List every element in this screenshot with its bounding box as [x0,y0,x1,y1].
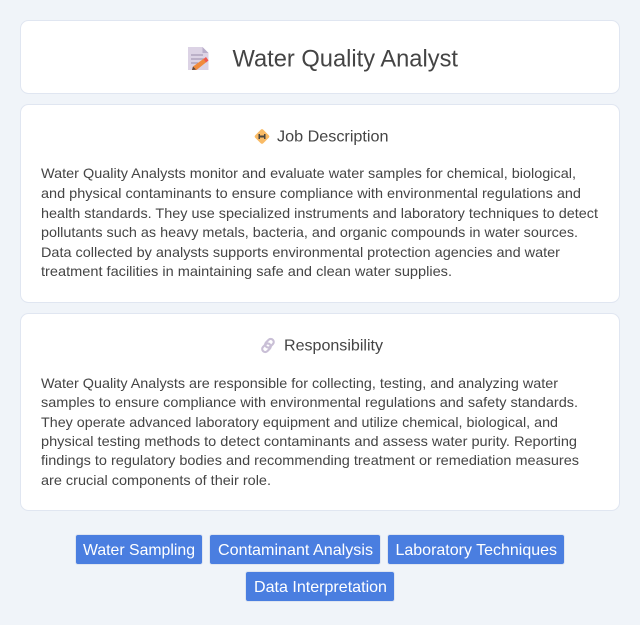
heading: responsibility: Responsibility [284,338,383,354]
icon: link [261,338,275,353]
title: Water Quality Analyst [232,46,458,72]
text block: responsibility: They operate advanced laboratory equipment and utilize chemical, biological, and [41,414,558,430]
tag: contaminant analysis: Contaminant Analysis [218,542,373,559]
text block: responsibility: findings to regulatory bodies and recommending treatment or remediation measures [41,452,579,468]
icon: construction diamond [254,128,270,145]
panel: responsibility [20,314,620,510]
text block: responsibility: Water Quality Analysts are responsible for collecting, testing, and analyzing water [41,375,558,391]
tag: data interpretation [246,572,394,602]
tag: laboratory techniques: Laboratory Techniques [396,542,557,559]
heading: job description: Job Description [277,128,388,146]
tag: data interpretation: Data Interpretation [254,579,387,596]
text block: responsibility [41,375,579,488]
panel: title card [20,20,620,94]
text block: responsibility: are crucial components of their role. [41,472,271,488]
icon: memo with pencil [188,47,208,70]
text block: job description: treatment facilities in maintaining safe and clean water supplies. [41,263,452,279]
text block: job description: and physical contaminants to ensure compliance with environmental regulations and [41,185,581,201]
tag: water sampling [76,534,202,564]
tag: laboratory techniques [388,534,564,564]
tag: contaminant analysis [210,534,380,564]
text block: job description: health standards. They use specialized instruments and laboratory techniques to detect [41,205,598,221]
text block: job description [41,165,598,279]
text block: job description: Data collected by analysts supports environmental protection agencies and water [41,244,560,260]
text block: responsibility: physical testing methods to detect contaminants and assess water purity. Reporting [41,433,577,449]
text block: responsibility: samples to ensure compliance with environmental regulations and safety standards. [41,394,578,410]
tag: water sampling: Water Sampling [83,542,195,559]
tags [76,534,564,602]
panel: job description [20,104,620,302]
text block: job description: Water Quality Analysts monitor and evaluate water samples for chemical, biological, [41,165,576,181]
text block: job description: pollutants such as heavy metals, bacteria, and organic compounds in water sources. [41,224,578,240]
